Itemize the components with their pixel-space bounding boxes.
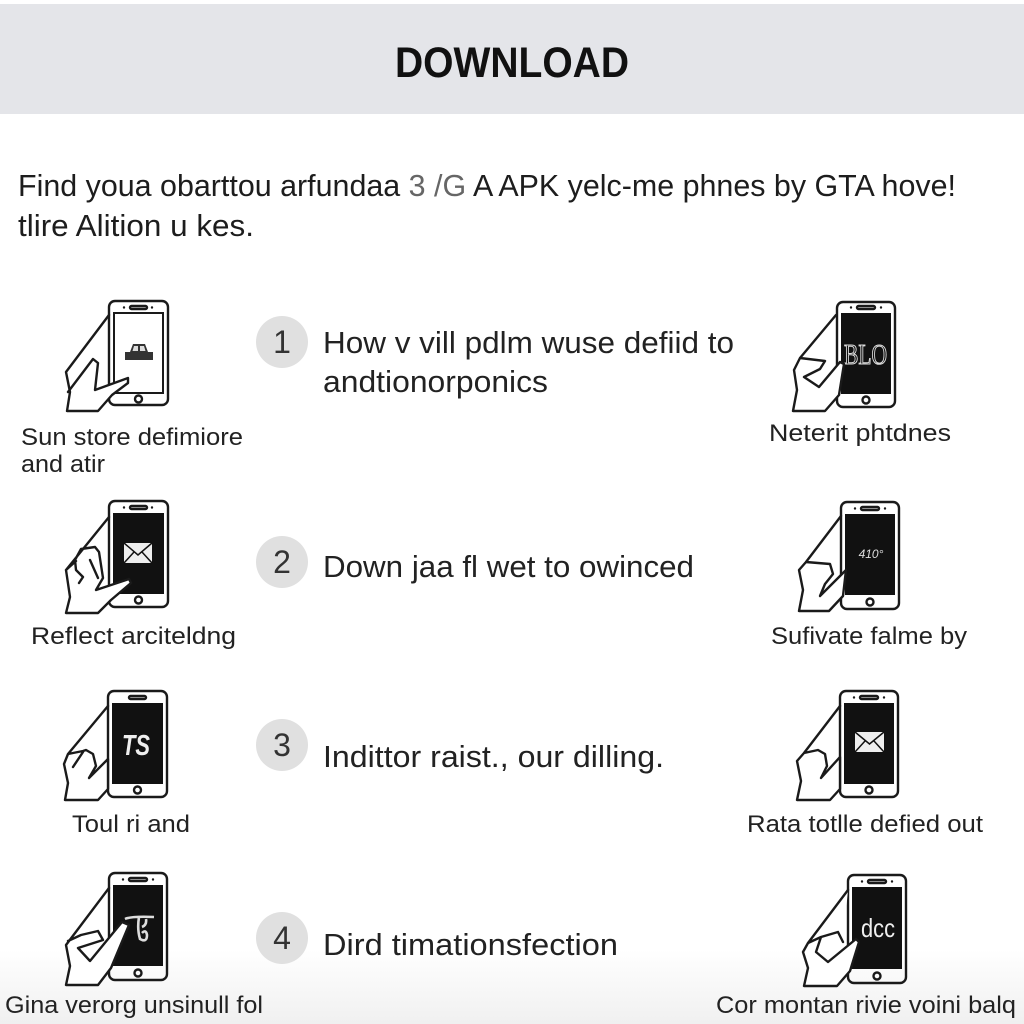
number badge 4: 4 — [273, 920, 291, 956]
caption: Toul ri and — [72, 811, 190, 838]
icon: hand holding phone with envelope — [66, 501, 168, 613]
icon: hand holding phone with digits: 410° — [859, 547, 884, 561]
caption: Neterit phtdnes — [769, 420, 951, 447]
panel: step 3 row — [64, 691, 983, 838]
caption: Sufivate falme by — [771, 623, 967, 650]
icon: hand tapping phone with dcc — [803, 875, 906, 986]
step 1 text — [323, 325, 734, 399]
intro text: tlire Alition u kes. — [18, 208, 254, 243]
caption: Sun store defimiore — [21, 424, 243, 451]
icon: hand tapping phone with dcc: dcc — [861, 913, 895, 943]
icon: hand holding phone with BLO — [793, 302, 895, 411]
icon: hand holding phone with TS mark — [64, 691, 167, 800]
icon: hand holding phone with car — [66, 301, 168, 411]
number badge 3 — [256, 719, 308, 771]
icon: hand tapping phone with glyph — [66, 873, 167, 985]
caption — [21, 424, 243, 478]
number badge 2 — [256, 536, 308, 588]
number badge 1: 1 — [273, 324, 291, 360]
caption: Reflect arciteldng — [31, 623, 236, 650]
title: DOWNLOAD — [395, 39, 629, 87]
number badge 4 — [256, 912, 308, 964]
step 2 text: Down jaa fl wet to owinced — [323, 549, 694, 584]
panel: step 1 row — [21, 301, 951, 478]
caption: Rata totlle defied out — [747, 811, 983, 838]
header banner — [0, 4, 1024, 114]
intro text: Find youa obarttou arfundaa 3 /G A APK yelc-me phnes by GTA hove! — [18, 168, 956, 203]
number badge 3: 3 — [273, 727, 291, 763]
panel: step 4 row — [5, 873, 1016, 1019]
number badge 2: 2 — [273, 544, 291, 580]
icon: hand holding phone with BLO: BLO — [844, 340, 887, 371]
step 3 text: Indittor raist., our dilling. — [323, 739, 664, 774]
step 4 text: Dird timationsfection — [323, 927, 618, 962]
icon: hand holding phone with digits — [799, 502, 899, 611]
step 1 text: andtionorponics — [323, 364, 548, 399]
number badge 1 — [256, 316, 308, 368]
caption: Gina verorg unsinull fol — [5, 992, 263, 1019]
intro text — [18, 168, 956, 243]
icon: hand holding phone with TS mark: TS — [122, 730, 150, 762]
step 1 text: How v vill pdlm wuse defiid to — [323, 325, 734, 360]
icon: hand holding phone with envelope — [797, 691, 898, 800]
caption: and atir — [21, 451, 105, 478]
caption: Cor montan rivie voini balq — [716, 992, 1016, 1019]
panel: step 2 row — [31, 501, 967, 650]
